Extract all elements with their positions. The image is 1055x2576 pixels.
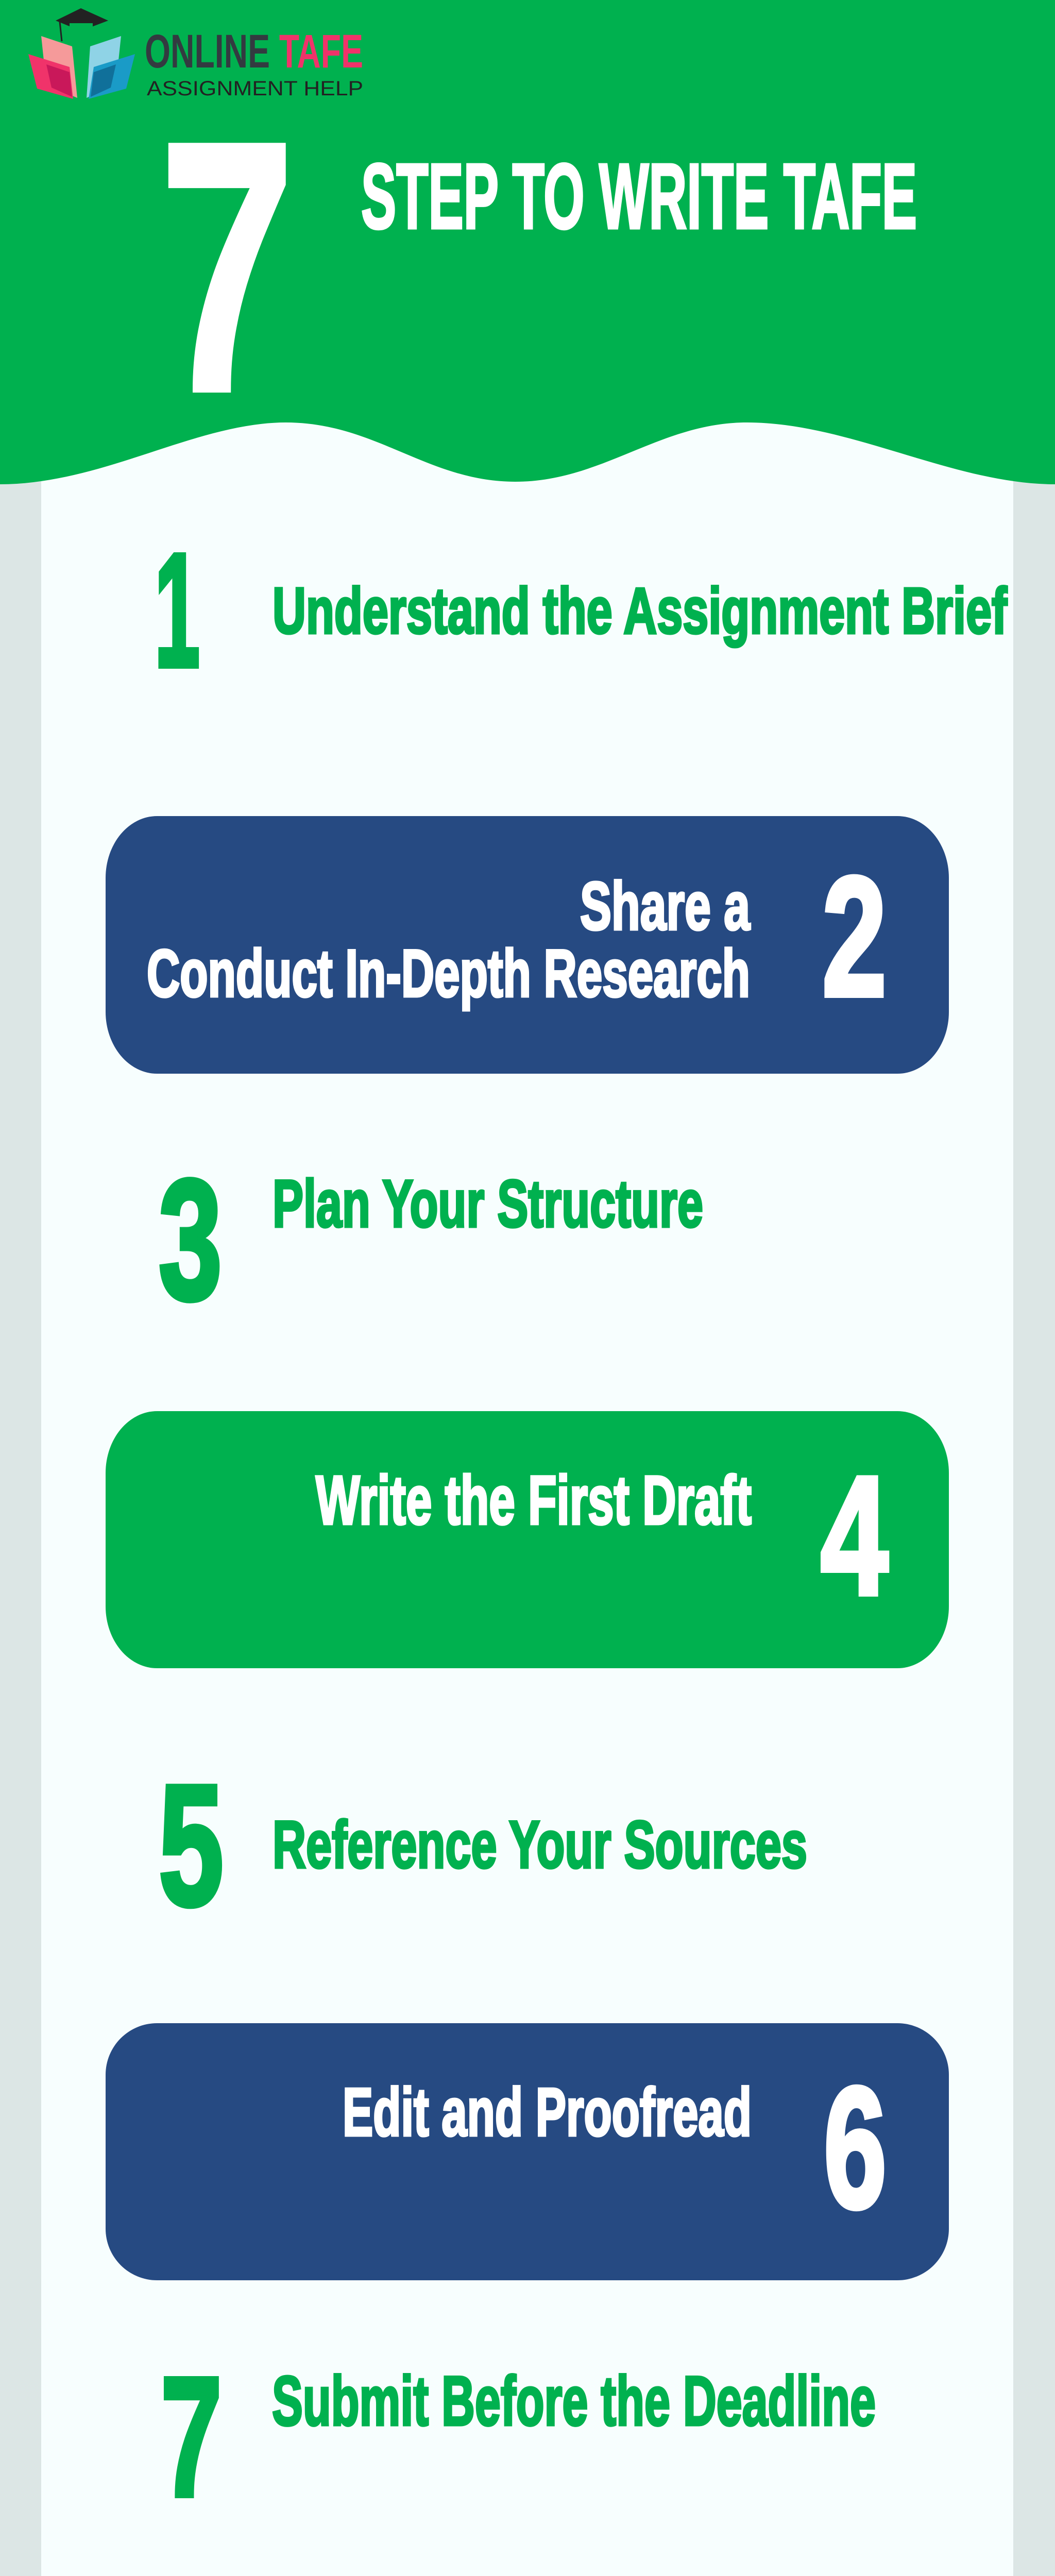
step 2 box	[106, 816, 949, 1074]
step 6 text: Edit and Proofread	[343, 2074, 752, 2150]
big number 7: 7	[160, 69, 295, 466]
step 1	[155, 520, 1008, 701]
step 4 box	[106, 1411, 949, 1668]
logo text: ONLINE TAFE: ONLINE TAFE	[145, 25, 363, 78]
step 2 text: Share a	[580, 868, 751, 944]
step 4 text: Write the First Draft	[316, 1462, 752, 1539]
number 5: 5	[159, 1749, 224, 1941]
step 3	[159, 1144, 703, 1335]
logo text: ASSIGNMENT HELP: ASSIGNMENT HELP	[147, 77, 363, 100]
number 1: 1	[155, 520, 200, 701]
number 7: 7	[161, 2342, 222, 2532]
content panel	[41, 361, 1013, 2576]
logo	[28, 8, 363, 100]
step 6 box	[106, 2023, 949, 2280]
header: green wave banner	[0, 0, 1055, 484]
step 2 box: Conduct In-Depth Research	[147, 936, 750, 1011]
number 4: 4	[821, 1441, 889, 1630]
step 5	[159, 1749, 807, 1941]
step 3 text: Plan Your Structure	[273, 1166, 703, 1241]
number 2: 2	[822, 841, 887, 1031]
step 5 text: Reference Your Sources	[273, 1807, 807, 1882]
number 6: 6	[824, 2052, 887, 2244]
step 7	[161, 2342, 876, 2532]
icon: book with mortarboard	[28, 8, 135, 99]
number 3: 3	[159, 1144, 222, 1335]
